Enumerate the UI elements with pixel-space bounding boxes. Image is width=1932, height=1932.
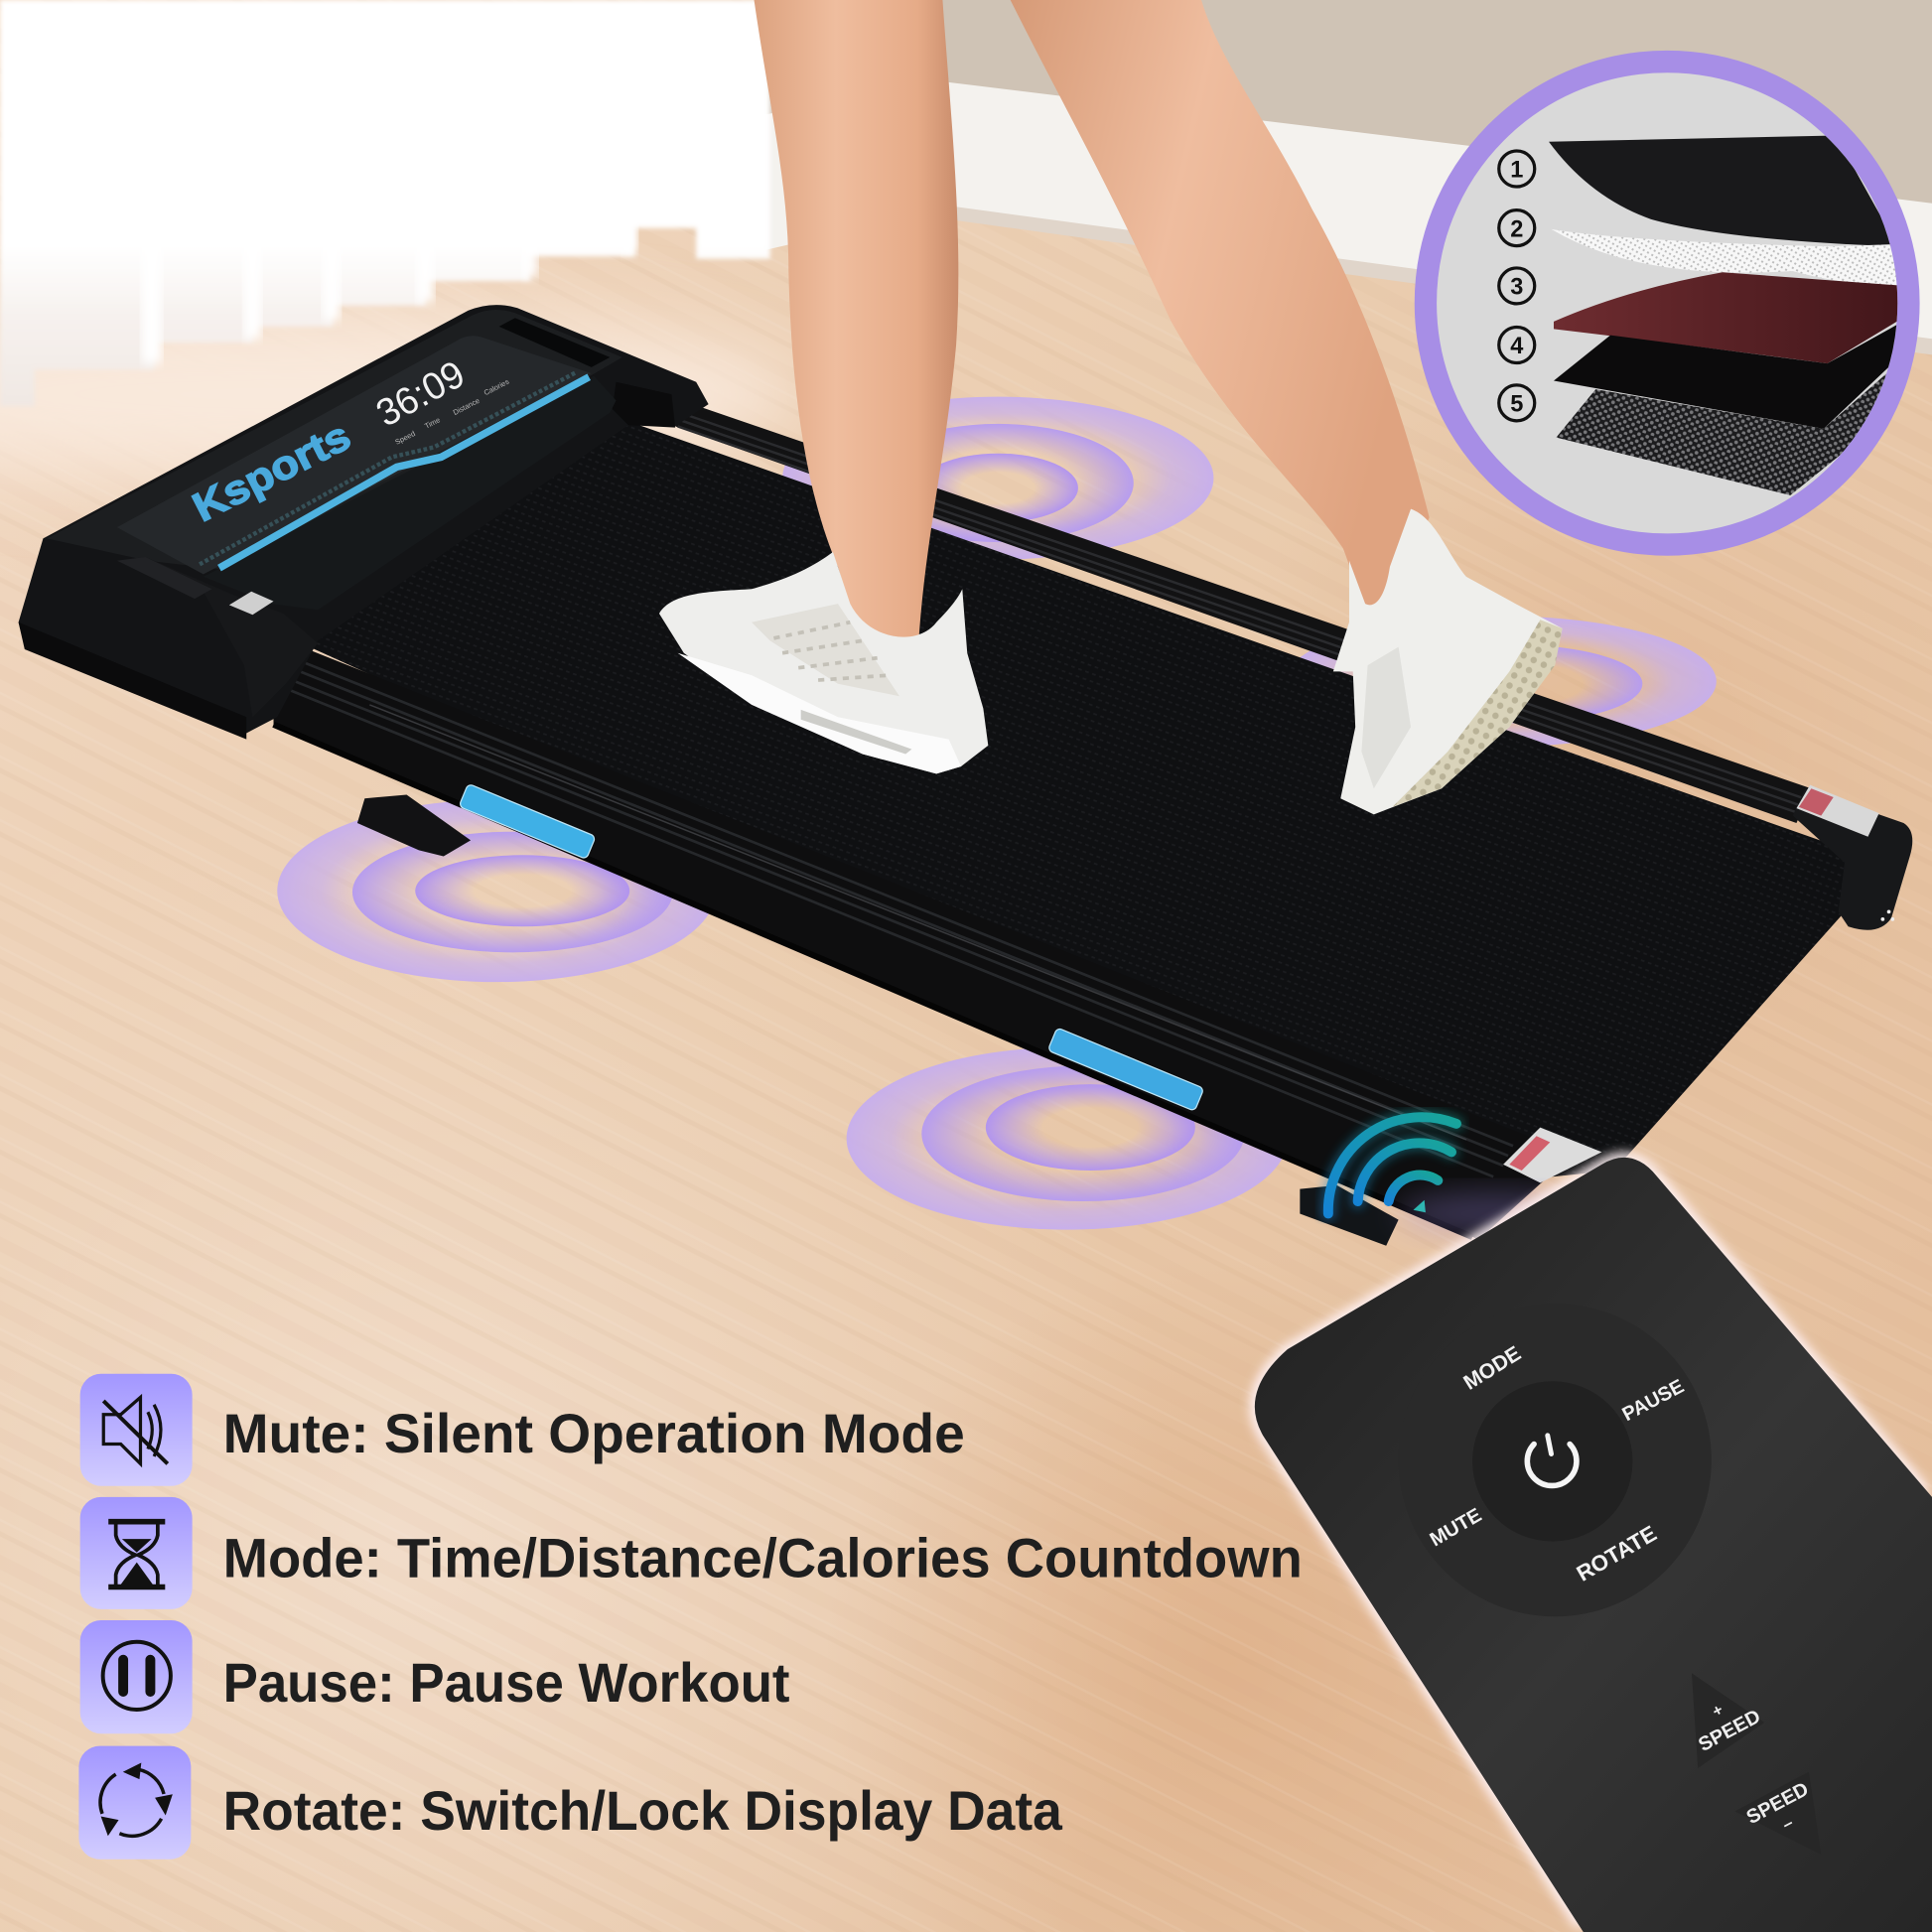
layer 4: black [1554,321,1905,429]
row: mode: Mode: Time/Distance/Calories Countdown [223,1527,1303,1589]
display labels [393,377,510,447]
vibration ripple: near side left [277,799,716,982]
row: rotate: Rotate: Switch/Lock Display Data [223,1779,1063,1842]
blue stripe [219,377,589,568]
button labels: MODE [1459,1342,1525,1395]
speed up button [1692,1673,1764,1768]
display labels: Speed [393,429,417,447]
console housing [19,305,709,740]
speed down button: – [1779,1812,1797,1835]
wall and baseboard [755,0,1932,354]
feet [357,794,1399,1246]
right shoe [1333,509,1563,814]
row: rotate [78,1746,1063,1860]
far side rail [675,404,1811,823]
right roller cap [1793,785,1912,930]
near side rail [274,647,1555,1240]
button labels: PAUSE [1618,1375,1688,1426]
icon: pause [103,1642,171,1710]
button labels: MUTE [1427,1504,1485,1551]
vibration ripple: far side right [1285,617,1717,747]
wireless signal icon [1328,1117,1456,1213]
row: mute: Mute: Silent Operation Mode [223,1402,965,1464]
time readout: 36:09 [369,352,472,436]
speed up button: + [1710,1701,1726,1721]
belt deck [296,421,1866,1182]
display labels: Calories [483,377,510,397]
layers inset circle: 4 [1510,333,1523,358]
curtains [0,0,801,481]
button labels [1427,1342,1688,1587]
row: mute [80,1374,965,1486]
QR label [229,592,274,615]
icon: muted speaker [103,1397,168,1463]
layers inset circle: 1 [1510,157,1523,183]
left shoe [659,552,988,773]
button labels: ROTATE [1573,1521,1661,1587]
power icon [1527,1436,1577,1485]
display labels: Distance [452,396,482,417]
layers inset circle: 3 [1510,274,1523,300]
display panel [117,336,592,574]
vibration ripple: far side left [782,397,1213,559]
layers inset circle [1426,62,1908,545]
control dial [1399,1304,1712,1616]
remote control [1255,1158,1932,1932]
right leg [1011,0,1430,628]
layer 3: maroon [1554,272,1905,363]
speed down button: SPEED [1743,1778,1812,1829]
speed up button: SPEED [1695,1706,1764,1756]
feature list [78,1374,1303,1860]
row: mode [80,1497,1303,1609]
layers inset circle: 2 [1510,215,1523,241]
console front lip [204,376,617,610]
blue side pads [459,783,1204,1111]
brand: Ksports [186,412,357,530]
layer 5: dotted base [1556,367,1894,495]
warning sticker [1503,1128,1601,1182]
layer numbers [1499,151,1535,421]
layer 2: white mesh [1552,229,1905,288]
row: pause [80,1620,790,1733]
inner console recess [613,382,675,428]
vibration ripple: near side right [847,1047,1288,1230]
icon: rotate arrows [100,1765,170,1836]
row: pause: Pause: Pause Workout [223,1651,790,1714]
layers inset circle: 5 [1510,391,1523,417]
layer 1: belt top [1549,136,1897,246]
left leg [755,0,958,653]
speed down button [1734,1772,1821,1855]
treadmill [19,305,1912,1246]
icon: hourglass [108,1522,165,1587]
display labels: Time [423,415,442,431]
